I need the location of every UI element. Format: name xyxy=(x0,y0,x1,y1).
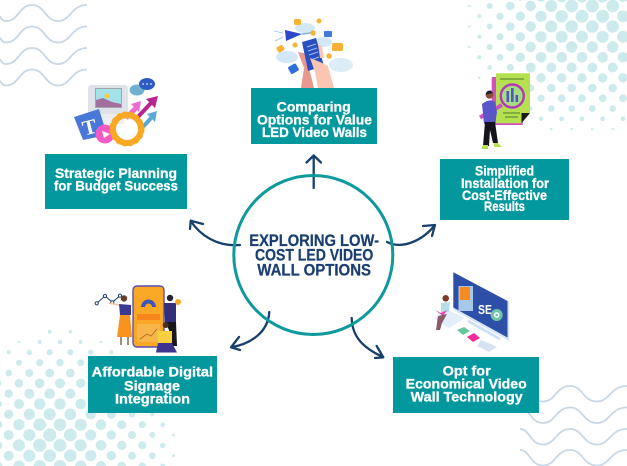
icon: team with mobile dashboard xyxy=(95,286,181,352)
heading: affordable digital signage: Integration xyxy=(115,391,190,407)
heading: simplified installation: Cost-Effective xyxy=(462,187,547,203)
icon: hands with phone and social bubbles xyxy=(274,18,353,88)
icon: person with magnifier and report xyxy=(480,73,530,149)
heading: affordable digital signage: Affordable Digital xyxy=(92,364,213,380)
heading: economical video wall xyxy=(406,363,527,405)
heading: strategic planning xyxy=(54,165,178,194)
panel: simplified installation xyxy=(440,159,569,220)
heading: affordable digital signage xyxy=(92,364,213,407)
heading: simplified installation: Simplified xyxy=(475,163,534,179)
heading: comparing options: LED Video Walls xyxy=(262,124,367,140)
heading: economical video wall: Opt for xyxy=(443,363,491,379)
central circle xyxy=(234,176,393,334)
central title: COST LED VIDEO xyxy=(255,247,373,265)
central title: WALL OPTIONS xyxy=(257,262,371,280)
heading: simplified installation xyxy=(461,163,549,214)
icon: SEO monitor with woman on laptop xyxy=(434,272,509,352)
central title xyxy=(249,232,379,280)
icon: SEO monitor with woman on laptop: SE xyxy=(478,302,492,317)
heading: economical video wall: Economical Video xyxy=(406,376,527,392)
halftone dots bottom left xyxy=(0,330,175,466)
panel: economical video wall xyxy=(393,357,539,413)
heading: strategic planning: Strategic Planning xyxy=(55,165,177,181)
icon: strategic planning illustration: T xyxy=(80,114,99,141)
heading: strategic planning: for Budget Success xyxy=(54,178,178,194)
heading: comparing options: Comparing xyxy=(277,99,351,115)
arrows xyxy=(190,156,435,358)
heading: affordable digital signage: Signage xyxy=(124,378,180,394)
icon: strategic planning illustration xyxy=(74,78,158,145)
halftone dots top right xyxy=(468,0,627,130)
central title: EXPLORING LOW- xyxy=(249,232,379,250)
panel: affordable digital signage xyxy=(88,356,217,413)
heading: comparing options xyxy=(257,99,372,140)
heading: economical video wall: Wall Technology xyxy=(411,389,523,405)
waves bottom right xyxy=(520,386,627,466)
heading: simplified installation: Results xyxy=(484,198,525,214)
panel: comparing options xyxy=(251,88,377,144)
heading: simplified installation: Installation for xyxy=(461,175,549,191)
heading: comparing options: Options for Value xyxy=(257,111,372,127)
panel: strategic planning xyxy=(45,154,187,209)
waves top left xyxy=(0,5,87,86)
